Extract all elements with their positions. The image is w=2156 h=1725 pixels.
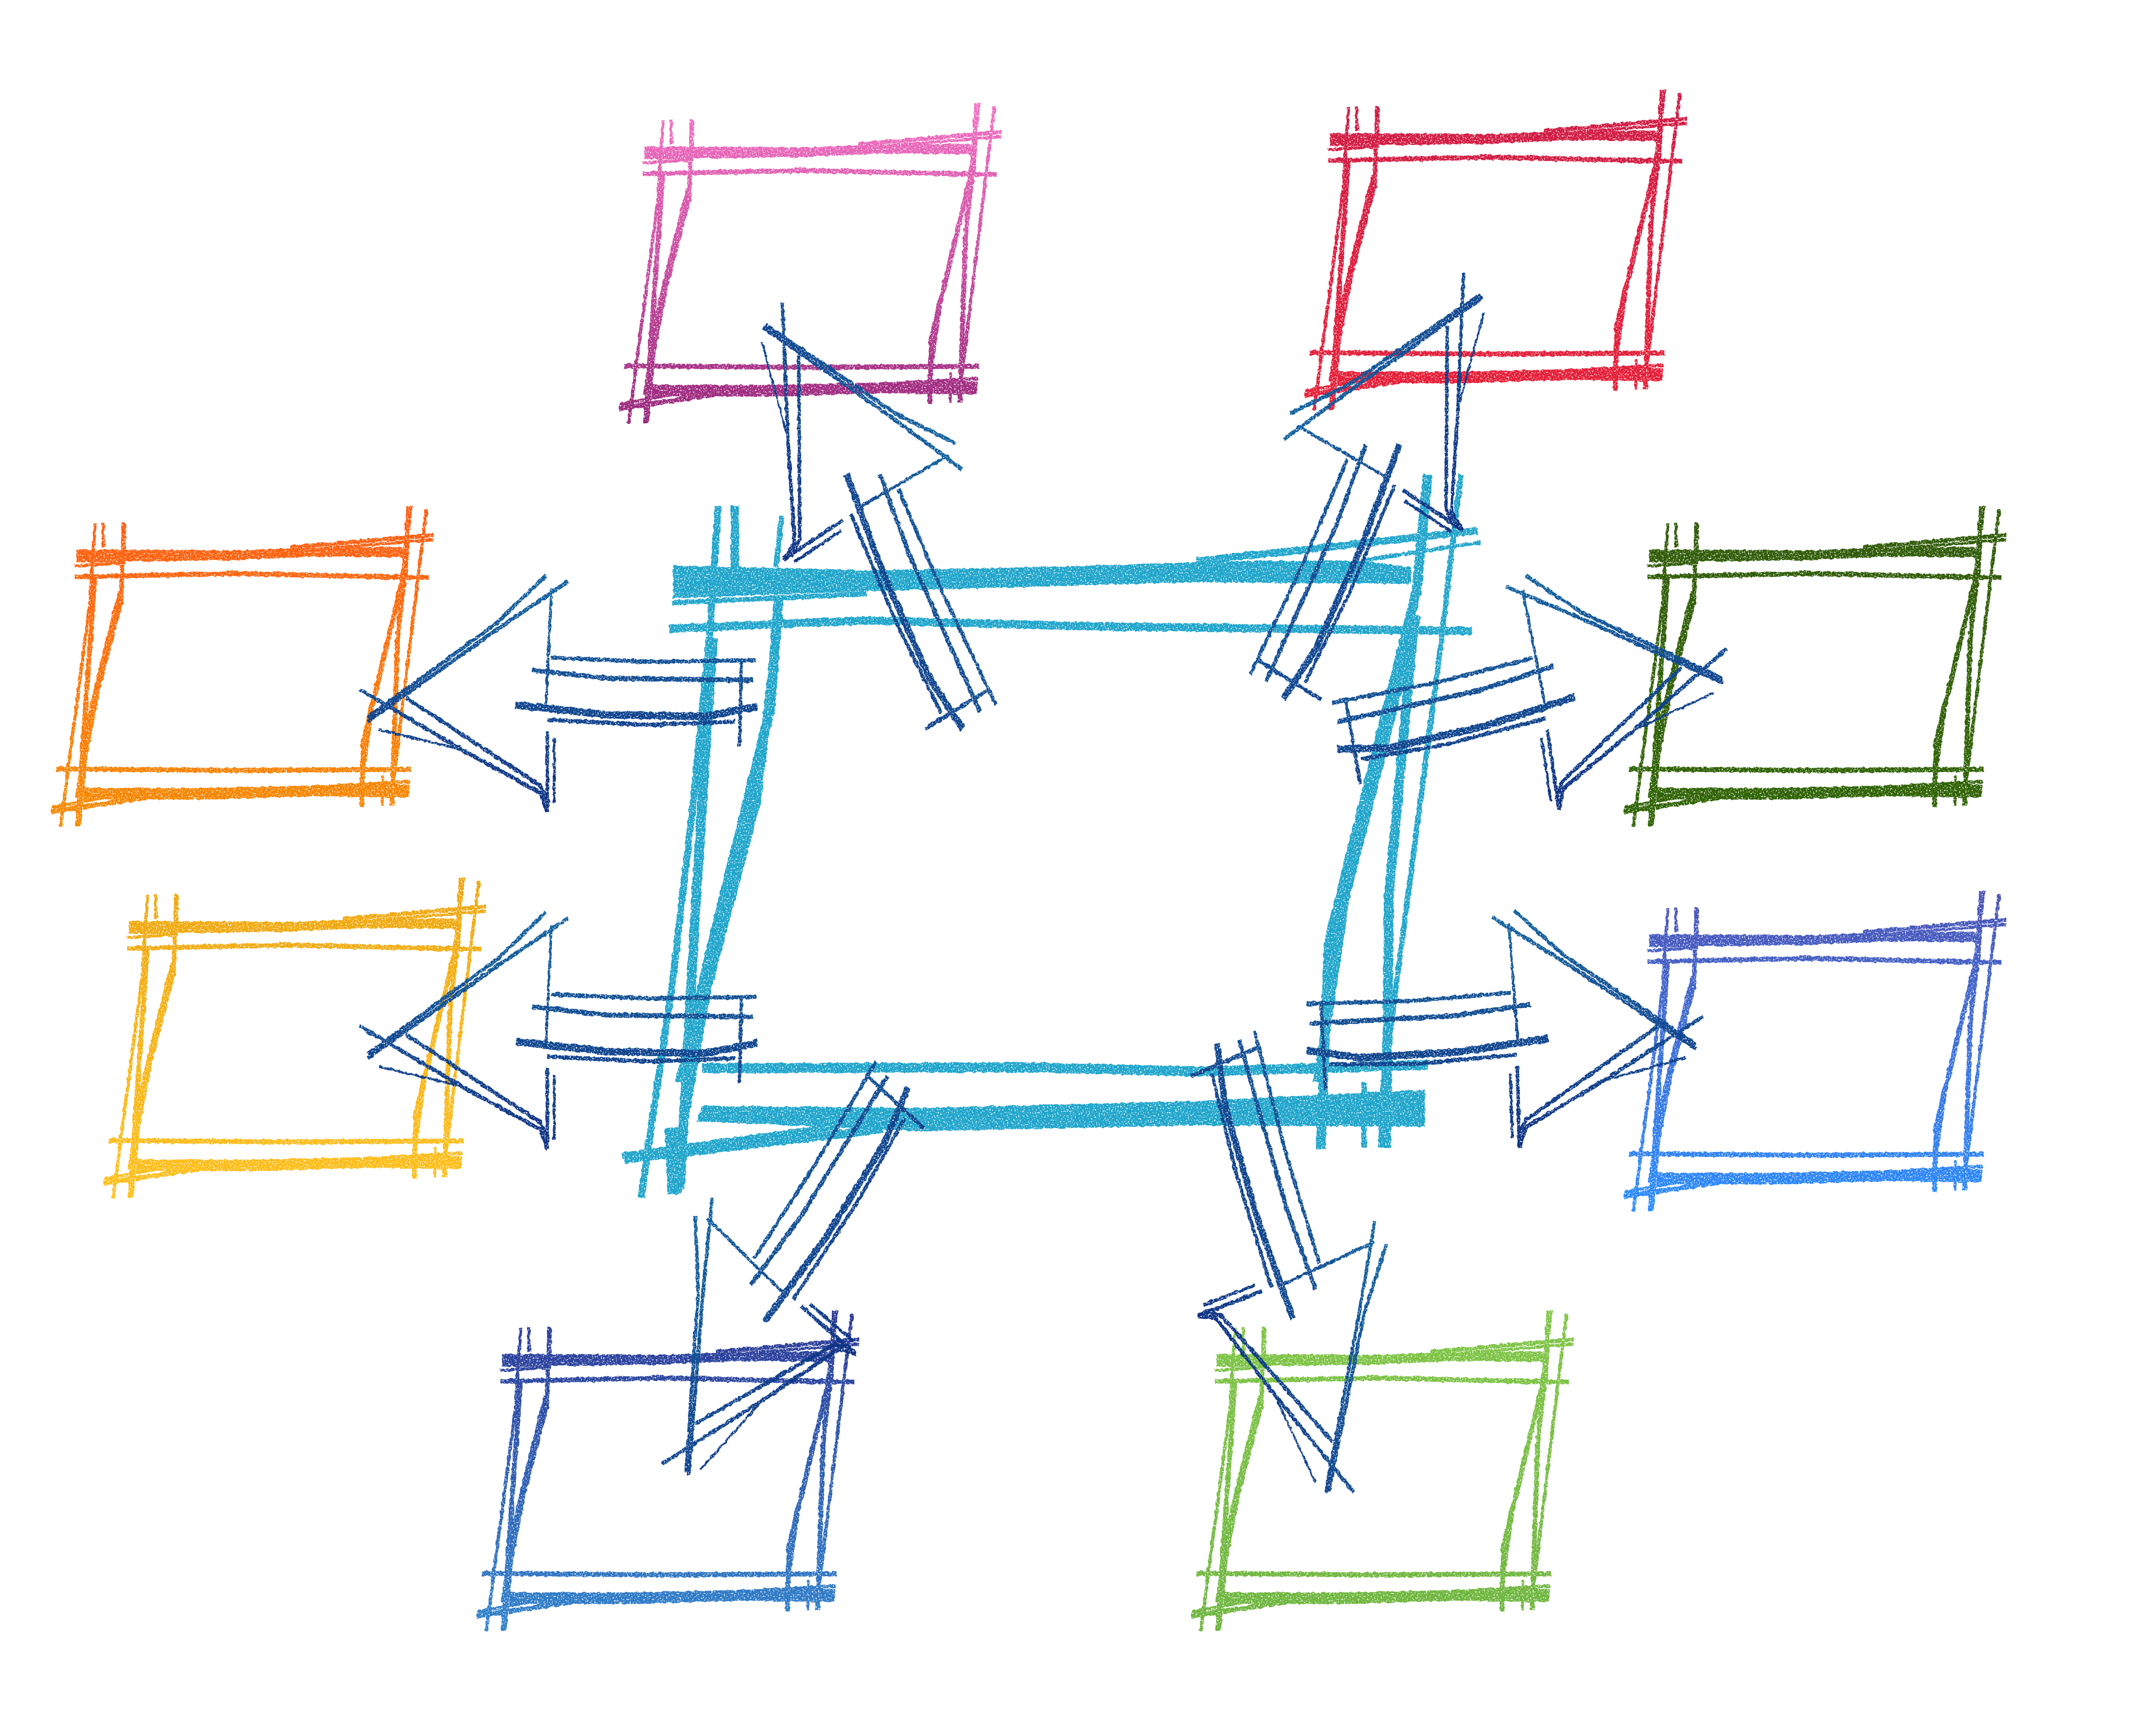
arrow: to red box (1188, 217, 1554, 750)
arrow: to green box (1133, 1003, 1444, 1531)
arrow: to navy box (586, 1011, 979, 1537)
arrow: to pink box (692, 248, 1058, 780)
arrow: to blue box (1303, 903, 1707, 1156)
box: navy (477, 1310, 859, 1631)
arrow: to dark green box (1318, 537, 1744, 853)
arrow: to orange box (359, 576, 757, 813)
arrow: to yellow box (359, 912, 757, 1149)
box: green (1191, 1310, 1573, 1631)
box: yellow (103, 878, 486, 1198)
box: orange (51, 506, 433, 827)
box: pink (619, 103, 1001, 423)
box: red (1305, 90, 1687, 411)
box: blue (1624, 891, 2006, 1211)
central box: cyan (622, 474, 1480, 1198)
box: dark green (1624, 506, 2006, 827)
